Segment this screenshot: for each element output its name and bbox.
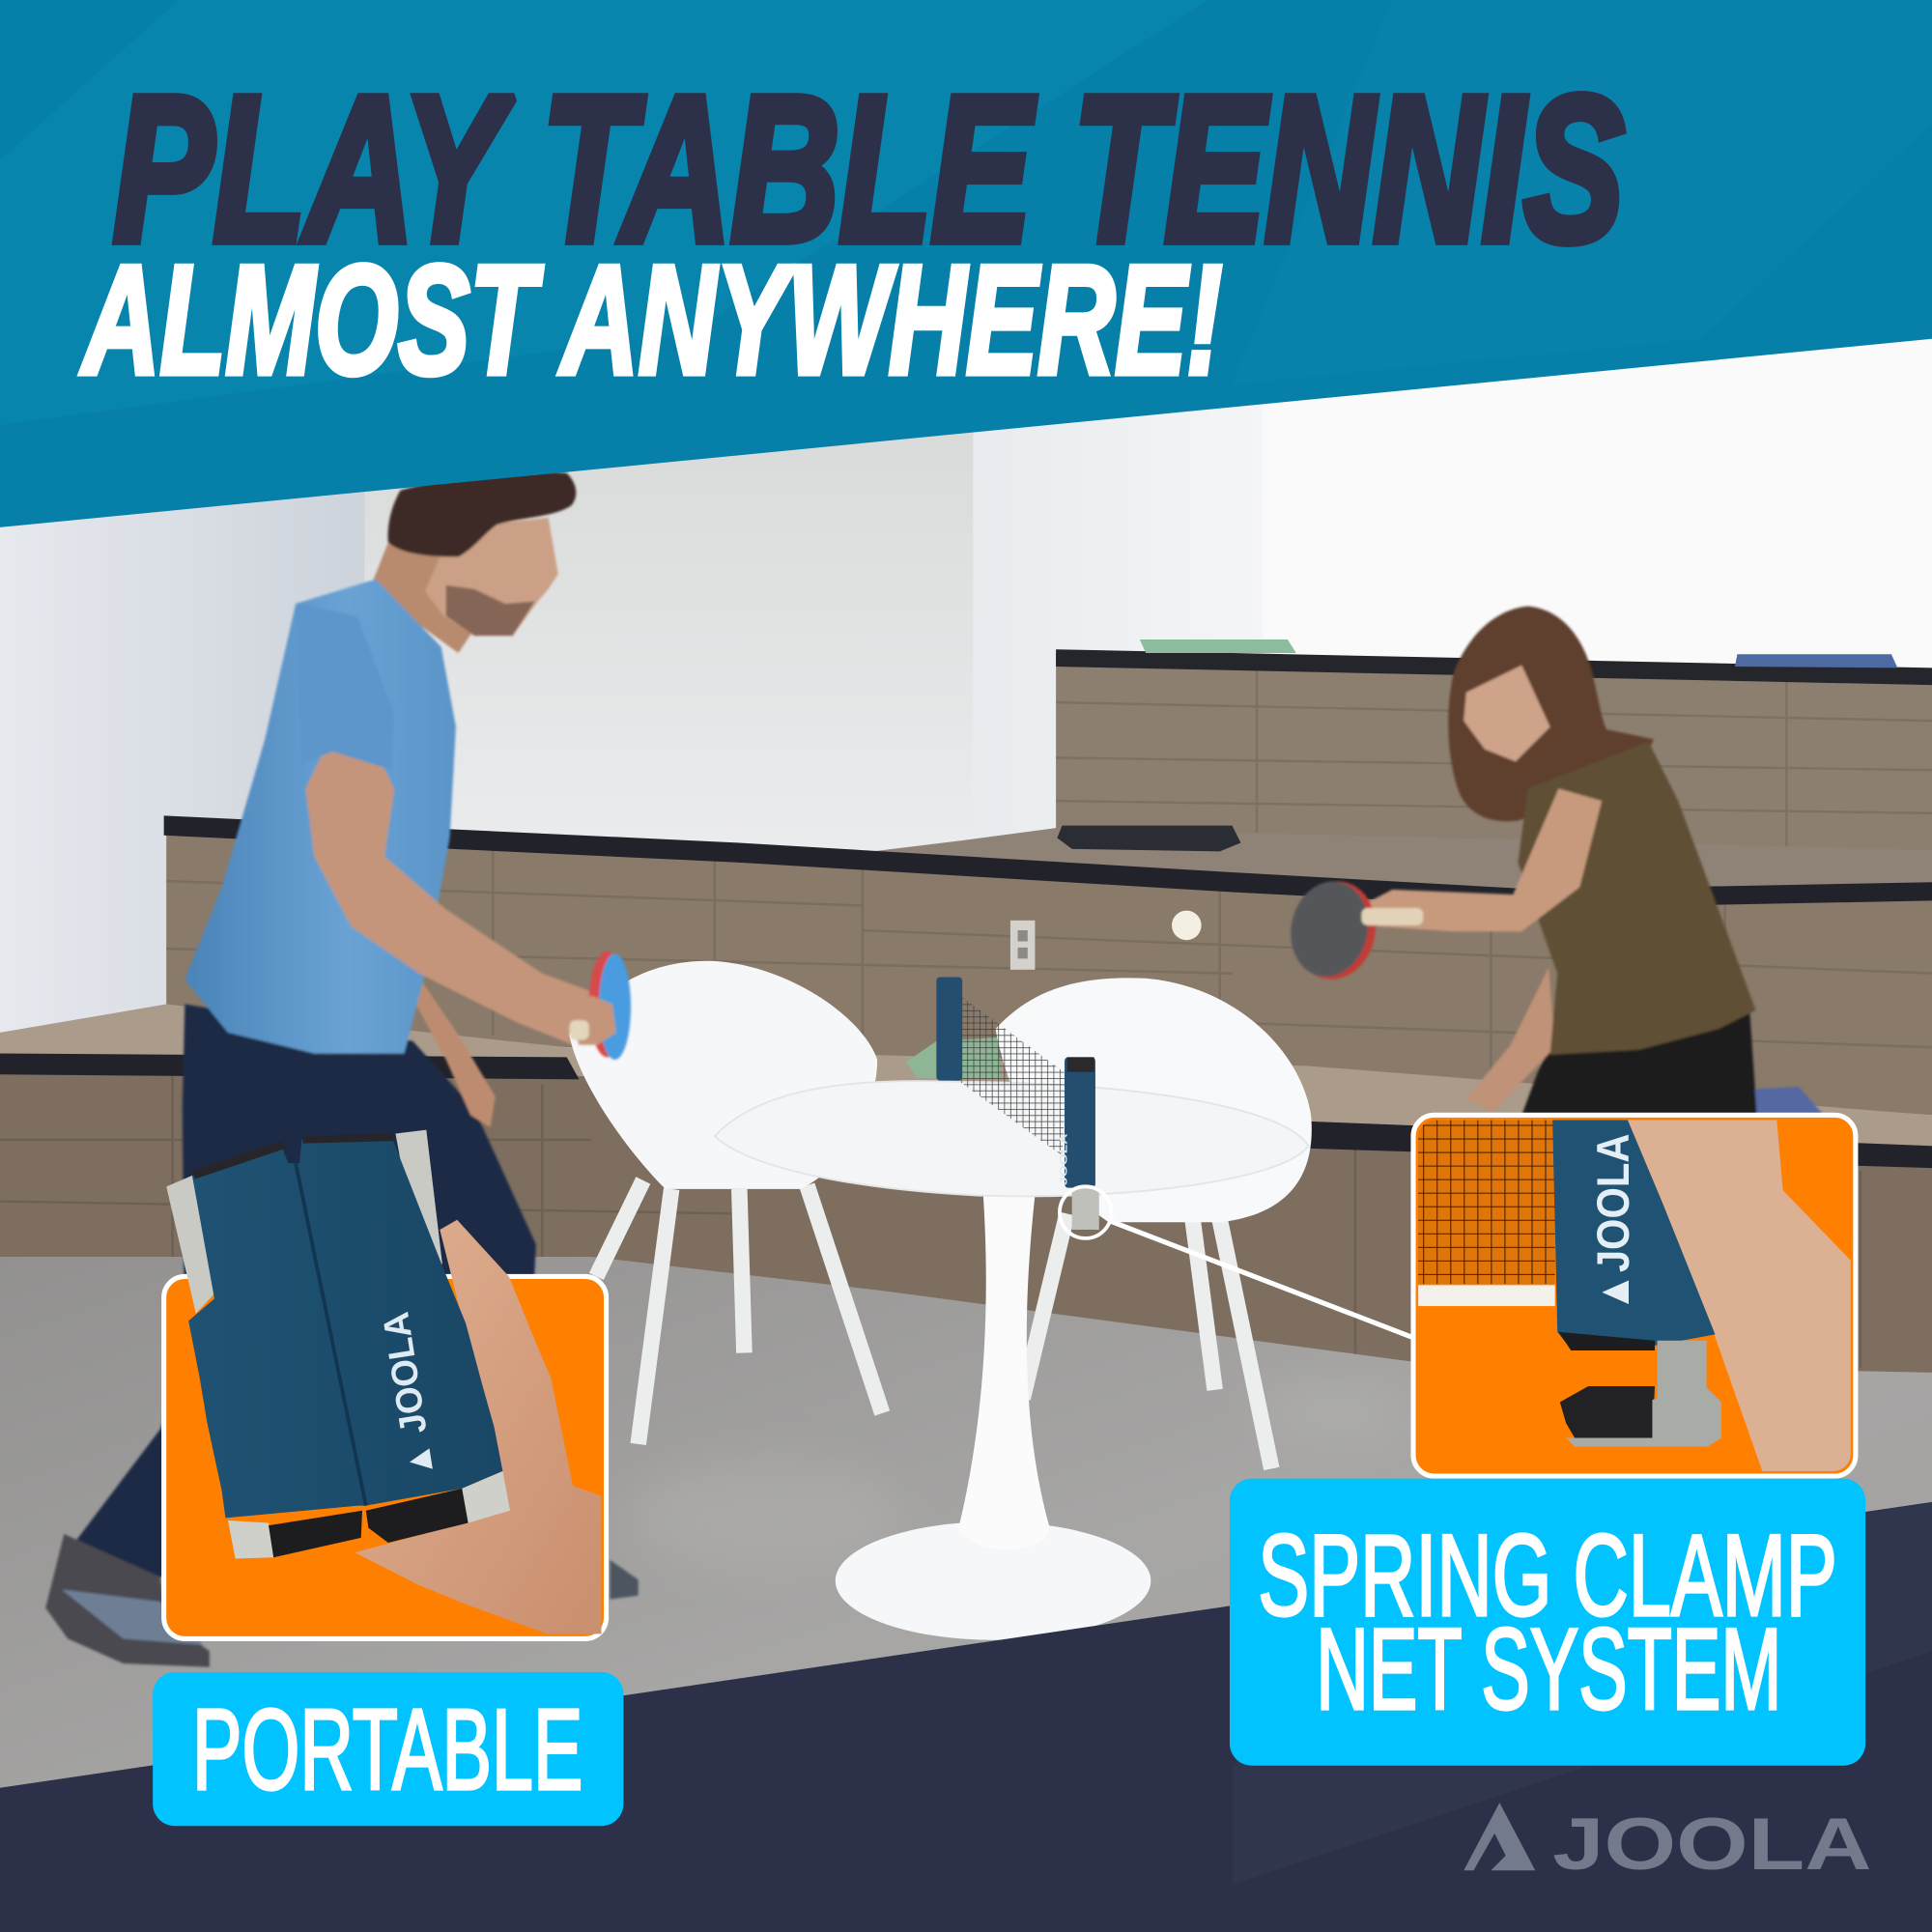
man far arm xyxy=(412,974,496,1127)
blue cushion xyxy=(1725,1087,1824,1119)
hand holding device xyxy=(355,1220,601,1634)
post xyxy=(1552,1120,1716,1346)
upper platform surface xyxy=(863,828,1932,897)
device body xyxy=(188,1137,502,1518)
woman paddle xyxy=(1282,873,1423,987)
connector line to clamp detail xyxy=(1060,1186,1414,1338)
device end pieces xyxy=(228,1471,510,1559)
man beard xyxy=(446,585,535,636)
right chair xyxy=(996,978,1312,1468)
green cushion under table xyxy=(906,1037,1001,1078)
man arm xyxy=(305,746,616,1047)
arm xyxy=(1628,1120,1853,1474)
ping pong ball xyxy=(1172,911,1202,940)
woman far arm xyxy=(1466,967,1555,1112)
label: portable: PORTABLE xyxy=(192,1687,582,1814)
man player xyxy=(45,471,639,1667)
post logo: ▲JOOLA xyxy=(1588,1133,1639,1312)
man face xyxy=(425,518,558,636)
man hair xyxy=(388,471,576,557)
woman top xyxy=(1518,742,1756,1055)
round table xyxy=(715,1081,1309,1640)
clamp stem xyxy=(1658,1341,1707,1403)
panel: portable detail card xyxy=(164,1130,607,1638)
wall outlet xyxy=(1010,921,1035,970)
woman player xyxy=(1282,607,1824,1119)
middle wood wall xyxy=(164,815,1932,1115)
panel: spring clamp detail card xyxy=(1413,1115,1856,1476)
label: spring clamp net system xyxy=(1230,1479,1865,1766)
woman hair xyxy=(1448,607,1654,821)
title line 2: ALMOST ANYWHERE! xyxy=(80,234,1222,407)
left device grip xyxy=(166,1176,214,1314)
clamp pad xyxy=(1560,1386,1655,1441)
woman arm xyxy=(1361,788,1602,931)
brand logo xyxy=(1463,1803,1872,1886)
upper bench xyxy=(1056,649,1932,863)
portable net on table xyxy=(936,977,1099,1230)
man t-shirt xyxy=(185,579,456,1054)
white chairs xyxy=(569,961,1312,1468)
logo mark xyxy=(1463,1803,1535,1870)
lower platform surface xyxy=(0,1005,1932,1152)
floor xyxy=(0,1257,1932,1932)
clamp base xyxy=(1566,1386,1721,1446)
post foot xyxy=(1559,1332,1655,1350)
lower wood wall xyxy=(0,1054,1932,1374)
man sleeve xyxy=(296,604,394,770)
device logo: ▲ JOOLA xyxy=(375,1309,442,1481)
device top caps xyxy=(192,1133,394,1179)
man jeans xyxy=(76,1005,536,1577)
man shoe xyxy=(45,1534,639,1667)
man neck xyxy=(370,540,483,653)
cushions xyxy=(1057,639,1897,851)
device centre seam xyxy=(296,1163,366,1506)
left chair xyxy=(569,961,882,1444)
top banner xyxy=(0,0,1932,527)
right device grip xyxy=(395,1130,442,1264)
woman pants xyxy=(1520,1010,1757,1119)
portable net on table: JOOLA xyxy=(1059,1133,1070,1185)
man hand and paddle xyxy=(569,952,631,1060)
label: portable xyxy=(153,1672,623,1826)
logo wordmark: JOOLA xyxy=(1552,1804,1872,1886)
bottom navy band xyxy=(0,1502,1932,1932)
net closeup xyxy=(1417,1120,1555,1306)
woman face xyxy=(1463,666,1550,761)
